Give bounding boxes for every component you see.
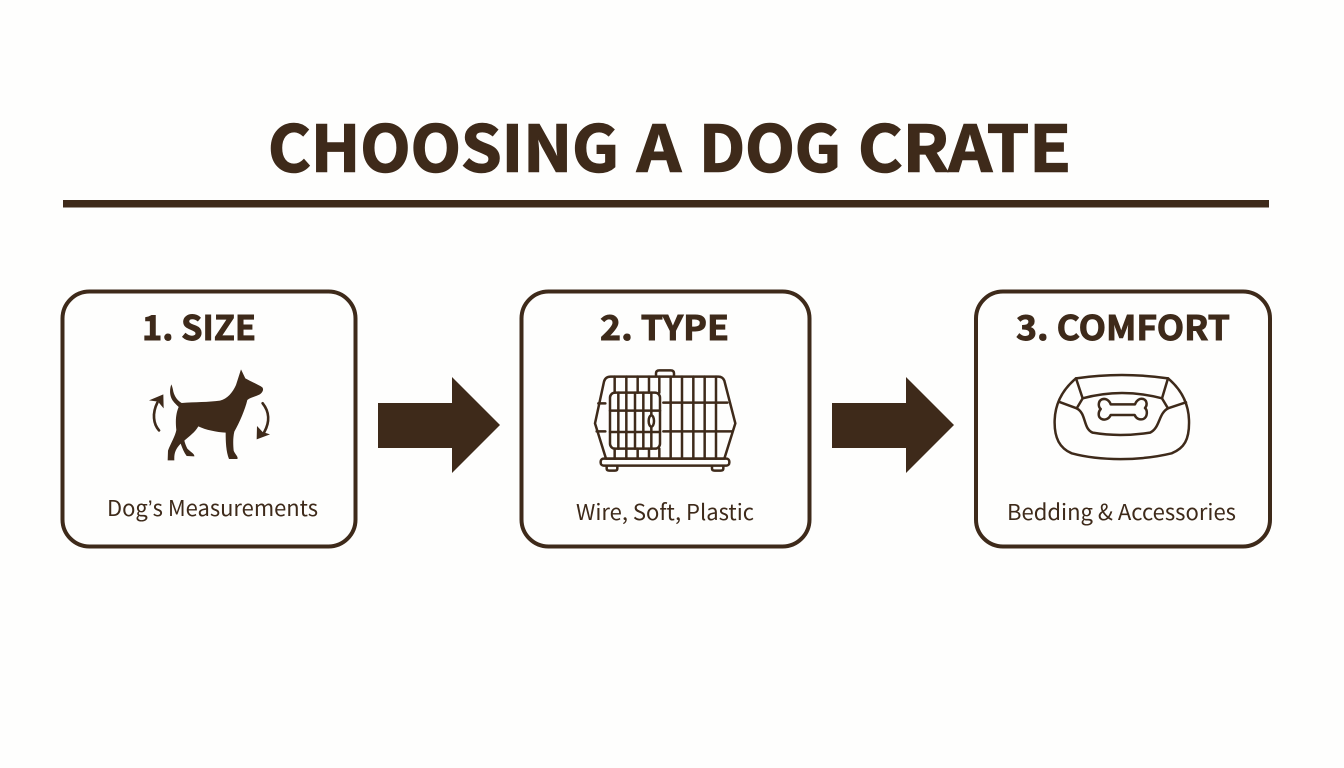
panel: comfort: [976, 292, 1270, 546]
panel frame: comfort: [976, 292, 1270, 546]
bed outer rim: [1055, 375, 1189, 459]
rotation arrow: right: [257, 403, 270, 439]
caption: comfort: Bedding & Accessories: [1007, 495, 1236, 527]
rotation arrow: left: [149, 394, 164, 430]
panel: type: [522, 292, 810, 546]
bone: [1099, 399, 1147, 420]
panel frame: size: [62, 292, 356, 546]
arrow: size to type: [378, 377, 500, 473]
crate bars: [597, 377, 732, 459]
dog silhouette: [168, 369, 263, 460]
door grid: [610, 393, 660, 449]
heading: 3. Comfort: 3. COMFORT: [1016, 301, 1230, 350]
arrow: type to comfort: [832, 377, 954, 473]
heading: 1. Size: 1. SIZE: [142, 301, 256, 350]
caption: type: Wire, Soft, Plastic: [576, 495, 754, 527]
crate handle: [656, 370, 674, 376]
icon: pet crate: [595, 370, 735, 471]
heading: 2. Type: 2. TYPE: [600, 301, 729, 350]
panel frame: type: [522, 292, 810, 546]
bed inner cushion: [1077, 393, 1168, 435]
crate shell: [595, 377, 735, 459]
crate feet: [607, 466, 723, 471]
title: A: [636, 98, 681, 190]
caption: size: Dog’s Measurements: [107, 491, 318, 523]
icon: dog bed with bone: [1055, 375, 1189, 459]
door latch: [649, 415, 654, 427]
crate base: [601, 459, 729, 466]
icon: dog with rotation arrows: [149, 369, 270, 460]
title underline: [63, 200, 1269, 208]
crate door: [610, 393, 660, 449]
title: DOG: [699, 98, 841, 190]
title: CHOOSING: [268, 98, 619, 190]
bed seams: [1059, 378, 1186, 408]
title: [268, 98, 1071, 190]
title: CRATE: [858, 98, 1071, 190]
panel: size: [62, 292, 356, 546]
